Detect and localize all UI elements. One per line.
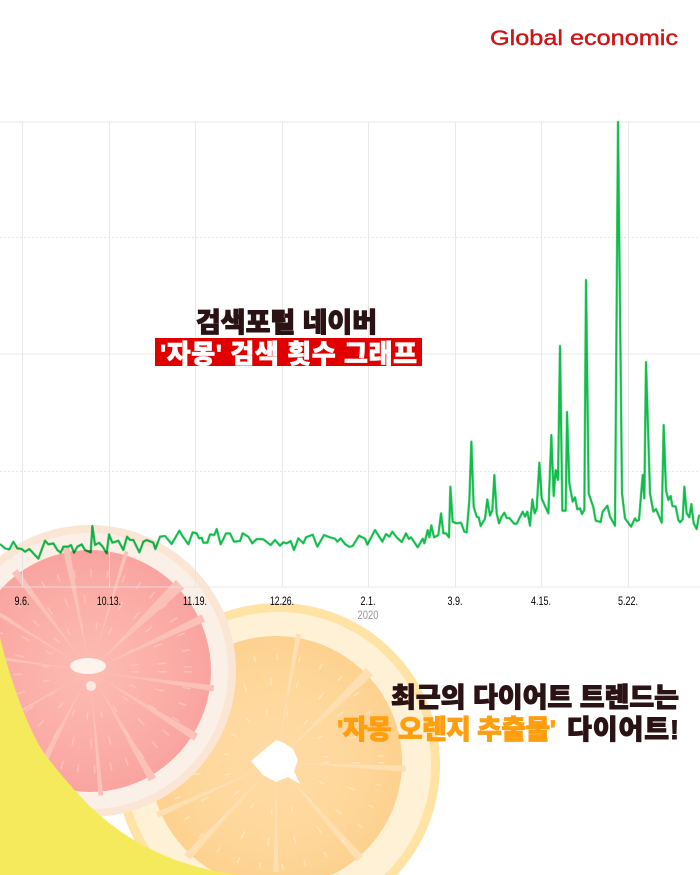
icon: grapefruit slice [0,525,236,817]
x axis labels: 2020 [358,608,379,622]
x axis labels: 5.22. [618,594,638,608]
chart grid [0,122,700,587]
callout: diet trend text [337,683,679,745]
icon: orange slice [116,603,440,875]
title: chart heading [155,308,422,369]
title line 1: 검색포털 네이버 [196,308,377,338]
callout line 2 dark: 다이어트! [567,715,679,745]
x axis labels: 11.19. [183,594,207,608]
x axis labels: 9.6. [14,594,30,608]
logo: Global economic: Global economic [490,27,678,50]
line series [0,122,700,559]
title line 2 on red band: '자몽' 검색 횟수 그래프 [160,339,417,369]
x axis labels: 2.1. [360,594,376,608]
x axis labels: 12.26. [270,594,294,608]
x axis labels: 4.15. [531,594,551,608]
x axis labels: 10.13. [97,594,121,608]
yellow corner shape [0,637,240,875]
callout line 2 orange: '자몽 오렌지 추출물' [337,715,556,745]
chart: Naver search count line graph [0,122,700,622]
x axis labels [14,594,638,622]
callout line 1: 최근의 다이어트 트렌드는 [391,683,679,713]
x axis labels: 3.9. [448,594,462,608]
